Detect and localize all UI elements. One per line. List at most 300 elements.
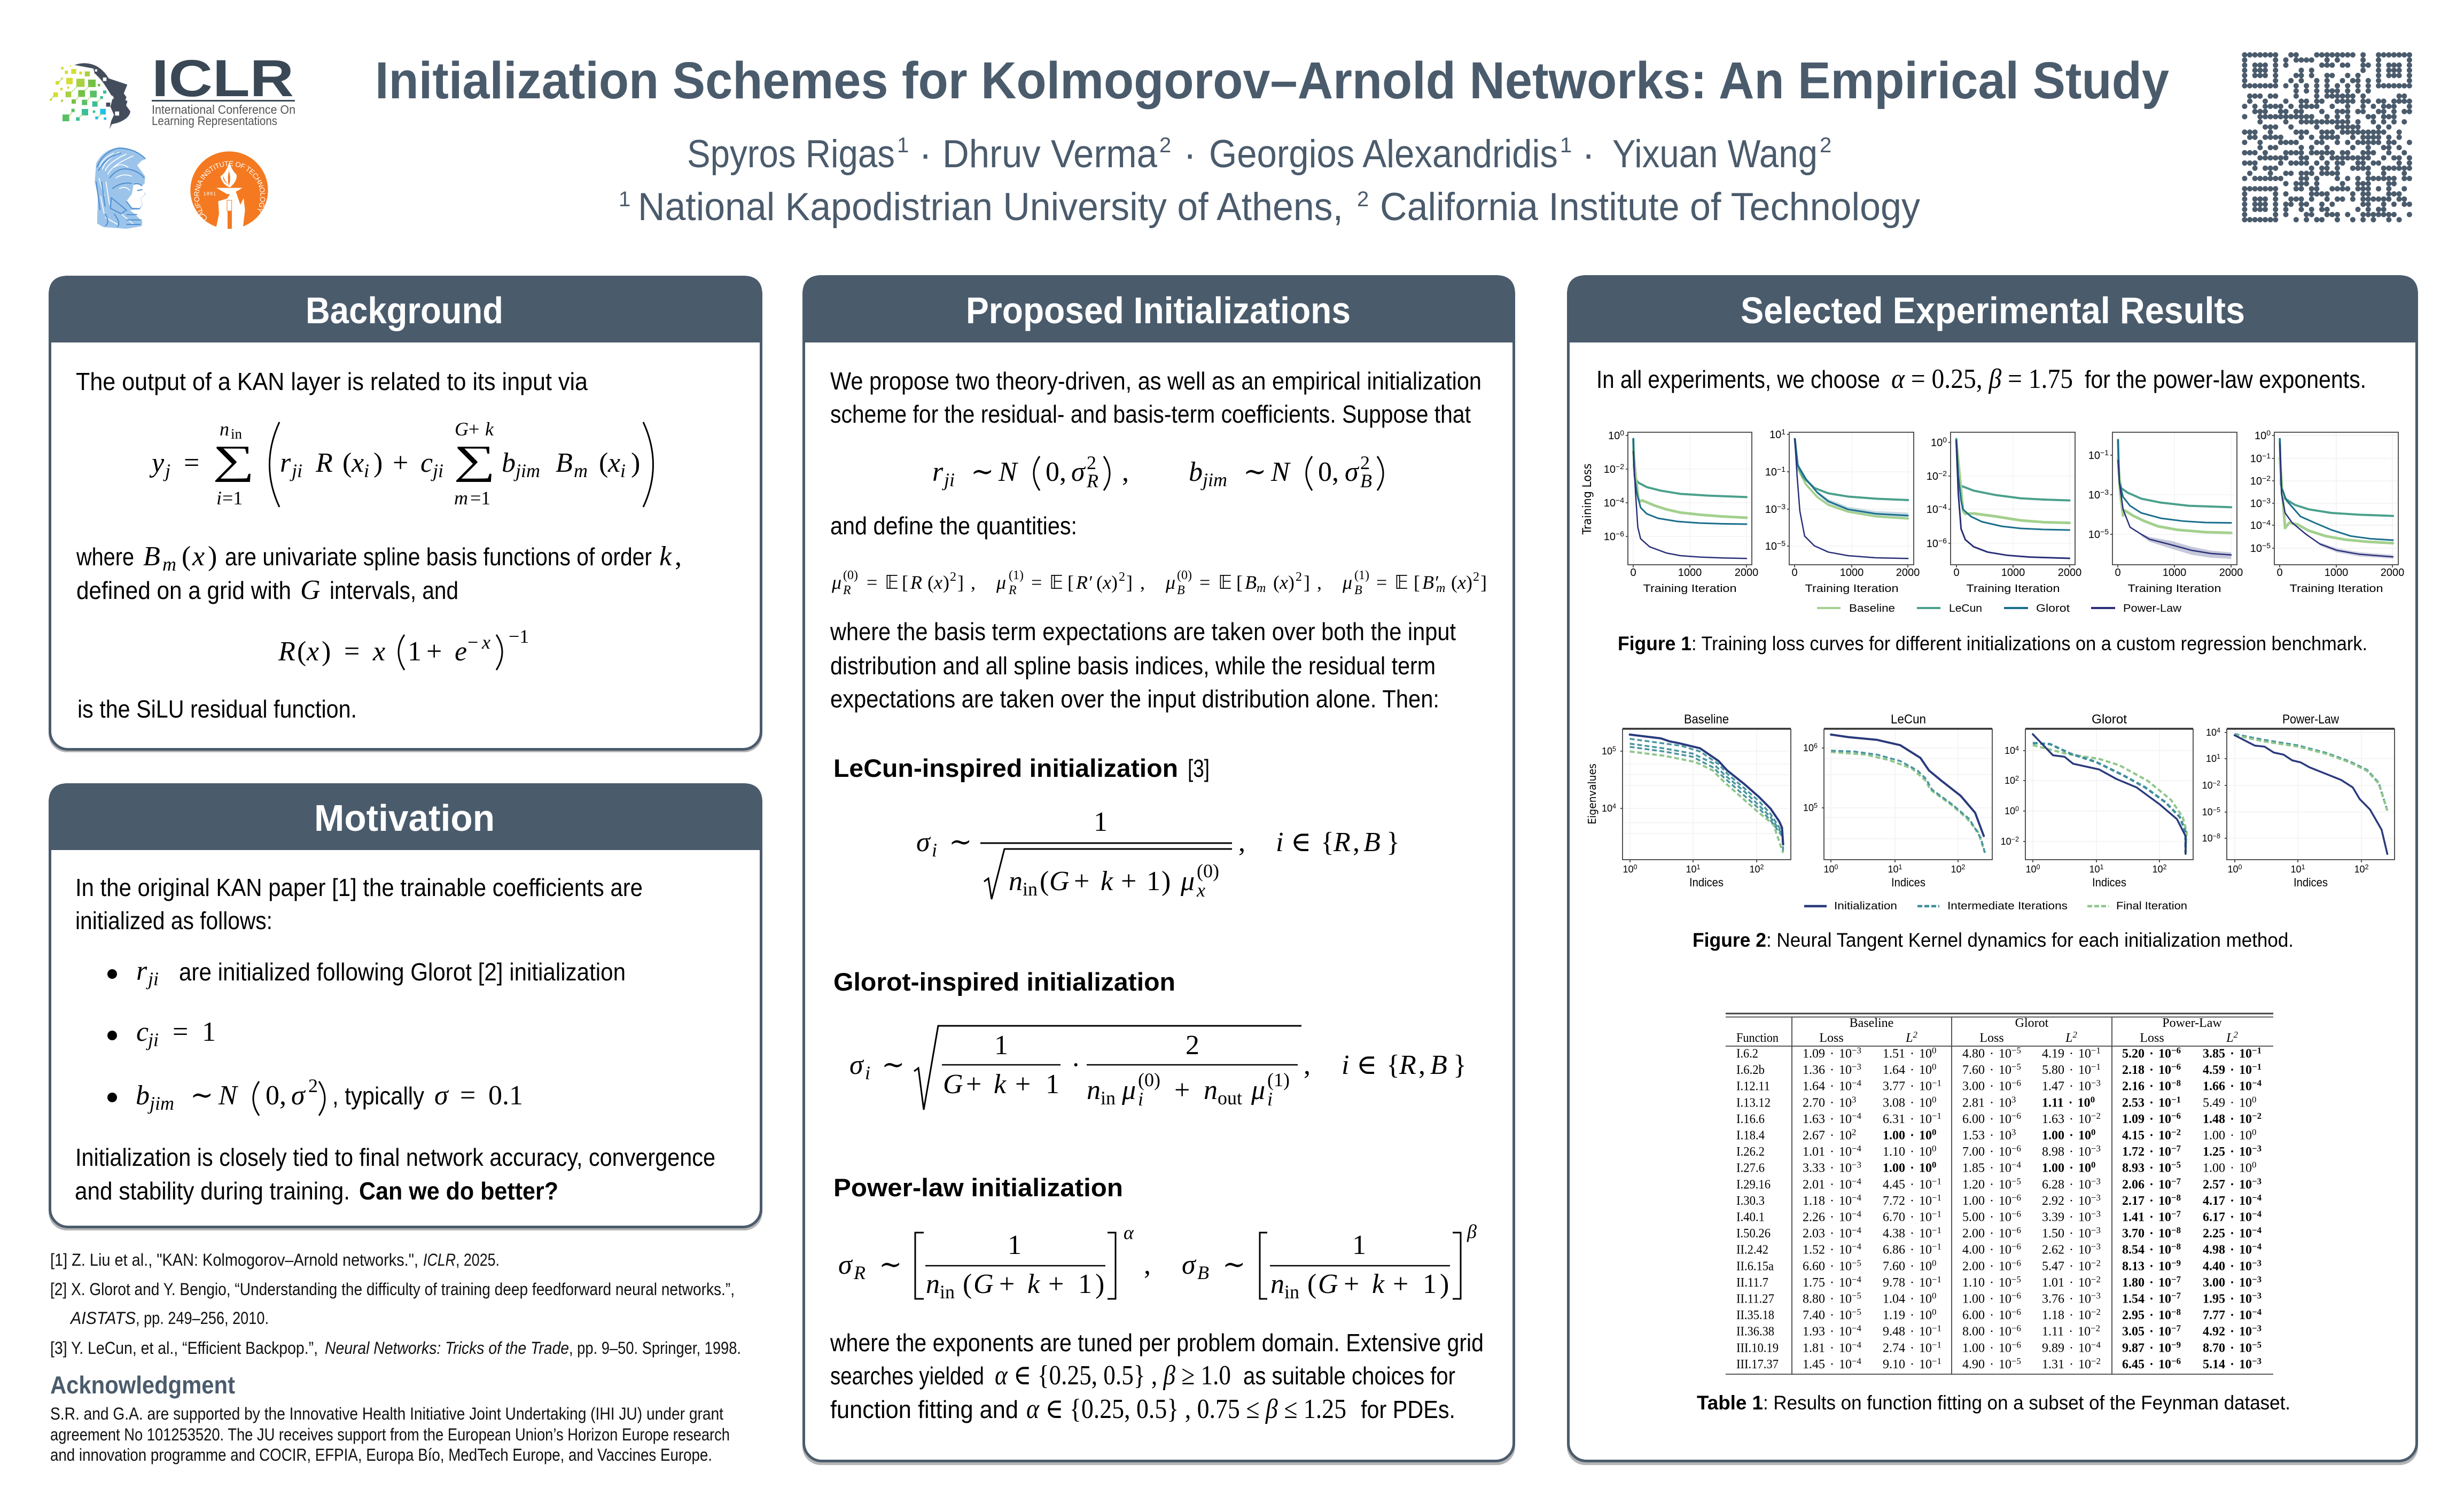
equation: expectations: (0) xyxy=(1177,568,1192,582)
table row: III.10.19: 9.89 · 10−4 xyxy=(2042,1339,2101,1355)
text: grid search results: for PDEs. xyxy=(1361,1396,1455,1423)
equation: coefficient distributions: B xyxy=(1360,470,1372,492)
equation: coefficient distributions: ∼ xyxy=(971,457,994,487)
equation: Power-law: in xyxy=(940,1281,955,1303)
equation: Power-law: + xyxy=(1393,1269,1408,1299)
equation: expectations: B xyxy=(1245,572,1257,593)
text: where B_m: ) xyxy=(208,541,217,572)
equation: Power-law: R xyxy=(853,1262,865,1283)
equation: expectations: μ xyxy=(831,572,841,593)
equation: SiLU: e xyxy=(455,636,467,667)
subplot: LeCun: Indices xyxy=(1891,876,1925,889)
equation: coefficient distributions: ∼ xyxy=(1243,457,1267,487)
equation: expectations: x xyxy=(1457,572,1466,593)
equation: KAN layer: n xyxy=(220,418,229,440)
table row: II.11.27 xyxy=(1736,1290,2262,1306)
equation: coefficient distributions: jim xyxy=(1200,469,1227,490)
table row: I.29.16: 1.20 · 10−5 xyxy=(1962,1176,2021,1191)
table row: II.36.38: 4.92 · 10−3 xyxy=(2203,1323,2262,1339)
table row: I.16.6: 1.48 · 10−2 xyxy=(2203,1111,2262,1126)
table header: L2 xyxy=(2226,1030,2238,1045)
seal year: 1891 xyxy=(204,191,216,196)
table row: I.29.16: 2.01 · 10−4 xyxy=(1803,1176,1861,1191)
equation: coefficient distributions: N xyxy=(1270,457,1291,487)
subplot 3: 2000 xyxy=(2058,567,2081,579)
text: where B_m: defined on a grid with xyxy=(76,576,291,604)
equation: expectations: 2 xyxy=(1119,570,1125,584)
equation: KAN layer: ) xyxy=(373,448,383,478)
equation: expectations: , xyxy=(971,572,976,593)
equation: KAN layer: m xyxy=(454,487,468,509)
caption: Figure 1: : Training loss curves for different initializations on a custom regression benchmark. xyxy=(1691,633,2367,654)
table row: I.18.4: 1.00 · 100 xyxy=(1883,1127,1936,1142)
text: proposal intro: scheme for the residual- and basis-term coefficients. Suppose that xyxy=(830,400,1471,428)
subplot: LeCun: 106 xyxy=(1803,742,1818,753)
equation: expectations: ] xyxy=(1480,572,1487,593)
equation: expectations: μ xyxy=(1165,572,1175,593)
equation: KAN layer: m xyxy=(574,460,588,481)
bullet: b_jim: σ xyxy=(291,1080,306,1111)
table row: I.16.6: 6.31 · 10−1 xyxy=(1883,1111,1941,1126)
equation: coefficient distributions: r xyxy=(932,457,944,487)
subplot: Glorot: 100 xyxy=(2005,805,2019,816)
legend: Figure 2: Final Iteration xyxy=(2116,900,2187,912)
equation: KAN layer: ( xyxy=(599,448,608,478)
equation: expectations: ( xyxy=(1273,572,1280,593)
equation: LeCun: { xyxy=(1321,827,1334,858)
table row: I.27.6: 3.33 · 10−3 xyxy=(1803,1159,1861,1175)
table row: I.27.6: 1.00 · 100 xyxy=(2203,1159,2256,1175)
table row: II.11.7: 9.78 · 10−1 xyxy=(1883,1274,1941,1290)
table row: III.17.37: 9.10 · 10−1 xyxy=(1883,1356,1941,1372)
table row: I.12.11: 3.77 · 10−1 xyxy=(1883,1078,1941,1094)
equation: KAN layer: ∑ xyxy=(454,438,496,482)
table row: III.10.19 xyxy=(1736,1339,2262,1355)
table header: Baseline xyxy=(1850,1016,1893,1030)
table row: I.40.1: 1.41 · 10−7 xyxy=(2122,1209,2181,1225)
subplot title: Glorot: Glorot xyxy=(2092,712,2127,727)
equation: expectations: (1) xyxy=(1354,568,1369,582)
text: where B_m: m xyxy=(162,554,176,575)
bullet: b_jim: ∼ xyxy=(190,1080,214,1111)
table row: I.6.2b: 2.18 · 10−6 xyxy=(2122,1062,2181,1077)
equation: LeCun: , xyxy=(1353,827,1360,858)
equation: Glorot: R xyxy=(1399,1050,1416,1080)
table row: I.6.2 xyxy=(1736,1045,2262,1061)
equation: Power-law: ( xyxy=(1307,1269,1316,1299)
subplot 4: 2000 xyxy=(2219,567,2243,579)
equation: KAN layer: ∑ xyxy=(213,438,255,482)
subplot 2: 10−3 xyxy=(1765,502,1785,516)
text: KAN paper intro xyxy=(75,874,643,934)
table row: II.11.7: 1.80 · 10−7 xyxy=(2122,1274,2181,1290)
logo subtitle: International Conference On xyxy=(152,103,295,116)
equation: KAN layer: y xyxy=(149,448,165,478)
equation: expectations: = xyxy=(1031,572,1042,593)
table row: I.16.6: 1.63 · 10−4 xyxy=(1803,1111,1861,1126)
table row: I.27.6: 1.00 · 100 xyxy=(2042,1159,2095,1175)
subplot 2: 101 xyxy=(1769,427,1785,441)
table row: III.10.19: III.10.19 xyxy=(1736,1341,1779,1355)
seal ring text: CALIFORNIA INSTITUTE OF TECHNOLOGY xyxy=(194,161,265,220)
equation: Glorot: 1 xyxy=(994,1030,1008,1061)
subplot: Glorot: 100 xyxy=(2025,863,2040,875)
table row: I.16.6: 1.63 · 10−2 xyxy=(2042,1111,2101,1126)
bullet: b_jim: jim xyxy=(147,1093,174,1114)
equation: KAN layer xyxy=(149,418,653,511)
table row: II.35.18: 2.95 · 10−8 xyxy=(2122,1307,2181,1322)
caption: Table 1: Table 1 xyxy=(1697,1392,1763,1414)
subplot 2 xyxy=(1765,427,1920,595)
text: acknowledgment xyxy=(50,1404,730,1464)
table row: III.17.37: 1.31 · 10−2 xyxy=(2042,1356,2101,1372)
equation: Power-law: n xyxy=(926,1269,940,1299)
subplot: Power-Law: 102 xyxy=(2354,863,2369,875)
equation: KAN layer: in xyxy=(231,426,243,442)
equation: SiLU: − xyxy=(467,632,478,653)
subplot 5: 1000 xyxy=(2325,567,2348,579)
text: experiments statement xyxy=(1596,364,2366,394)
equation: expectations: B xyxy=(1354,583,1362,597)
equation: Power-law: + xyxy=(1048,1269,1064,1299)
subplot: LeCun xyxy=(1803,712,1992,889)
table row: II.11.27: 3.76 · 10−3 xyxy=(2042,1290,2101,1306)
legend: Figure 2 xyxy=(1804,900,2187,912)
table row: II.11.27: II.11.27 xyxy=(1736,1292,1774,1306)
equation: Glorot: } xyxy=(1453,1050,1467,1080)
equation: expectations: 2 xyxy=(1473,570,1479,584)
equation: expectations: μ xyxy=(996,572,1006,593)
table row: II.35.18: 1.18 · 10−2 xyxy=(2042,1307,2101,1322)
text: SiLU residual: is the SiLU residual function. xyxy=(77,695,357,723)
equation: Glorot: out xyxy=(1218,1087,1242,1109)
equation: Power-law: σ xyxy=(838,1250,853,1280)
table row: III.10.19: 2.74 · 10−1 xyxy=(1883,1339,1941,1355)
equation: Glorot: , xyxy=(1304,1050,1311,1080)
table header: Loss xyxy=(1979,1031,2004,1045)
equation: expectations: ) xyxy=(943,572,949,593)
equation: LeCun: ∈ xyxy=(1291,827,1311,858)
table row: I.40.1: 5.00 · 10−6 xyxy=(1962,1209,2021,1225)
subplot: LeCun: 102 xyxy=(1951,863,1966,875)
subplot: LeCun: 100 xyxy=(1823,863,1838,875)
subplot 3: 10−6 xyxy=(1927,536,1947,550)
equation: Glorot: ∼ xyxy=(882,1050,905,1080)
table row: II.36.38: 1.93 · 10−4 xyxy=(1803,1323,1861,1339)
table row: I.40.1: I.40.1 xyxy=(1736,1211,1765,1225)
equation: KAN layer: + xyxy=(469,418,479,440)
equation: expectations: [ xyxy=(1236,572,1243,593)
equation: coefficient distributions: 0, xyxy=(1046,457,1066,487)
equation: Power-law: α xyxy=(1124,1222,1134,1243)
table row: I.6.2: 4.80 · 10−5 xyxy=(1962,1045,2021,1061)
table row: II.11.27: 1.04 · 100 xyxy=(1883,1290,1936,1306)
caption: Figure 1: Figure 1 xyxy=(1618,633,1691,654)
authors: Dhruv Verma xyxy=(942,133,1157,176)
table row: I.29.16: I.29.16 xyxy=(1736,1178,1771,1191)
icon: ICLR pixel head xyxy=(50,63,130,129)
subplot: Power-Law: 10−2 xyxy=(2202,780,2220,791)
subplot 4: 10−5 xyxy=(2088,527,2109,541)
table row: I.6.2: 4.19 · 10−1 xyxy=(2042,1045,2101,1061)
subplot 5 xyxy=(2250,428,2404,595)
table row: I.13.12: 3.08 · 100 xyxy=(1883,1094,1936,1110)
bullet: b_jim: = xyxy=(460,1080,475,1111)
table row: II.11.7: 3.00 · 10−3 xyxy=(2203,1274,2262,1290)
table row: I.18.4: 1.00 · 100 xyxy=(2203,1127,2256,1142)
equation: Glorot: (0) xyxy=(1138,1069,1160,1090)
legend: Figure 1 xyxy=(1817,603,2182,614)
table row: II.11.27: 8.80 · 10−5 xyxy=(1803,1290,1861,1306)
text: where B_m: intervals, and xyxy=(330,576,458,604)
table row: I.13.12: I.13.12 xyxy=(1736,1096,1771,1110)
table row: I.12.11: 1.47 · 10−3 xyxy=(2042,1078,2101,1094)
table row: II.36.38 xyxy=(1736,1323,2262,1339)
equation: Power-law: ) xyxy=(1440,1269,1449,1299)
table row: II.2.42: 4.00 · 10−6 xyxy=(1962,1241,2021,1257)
equation: expectations: ) xyxy=(1111,572,1118,593)
bullet: r_ji xyxy=(107,956,626,989)
equation: Power-law: G xyxy=(973,1269,994,1299)
table row: I.12.11: 1.64 · 10−4 xyxy=(1803,1078,1861,1094)
table row: I.13.12: 1.11 · 100 xyxy=(2042,1094,2095,1110)
affiliations: National Kapodistrian University of Athens, xyxy=(638,185,1343,229)
legend: Figure 1: LeCun xyxy=(1949,603,1982,614)
table row: I.16.6: 6.00 · 10−6 xyxy=(1962,1111,2021,1126)
equation: expectations: [ xyxy=(1067,572,1074,593)
equation: LeCun: G xyxy=(1049,866,1070,897)
authors: 1 xyxy=(1560,134,1572,157)
equation: KAN layer: = xyxy=(184,448,199,478)
equation: coefficient distributions xyxy=(932,452,1383,492)
affiliations xyxy=(619,185,1920,229)
panel: Selected Experimental Results xyxy=(1567,275,2418,1465)
table row: I.27.6: 8.93 · 10−5 xyxy=(2122,1159,2181,1175)
table row: I.12.11 xyxy=(1736,1078,2262,1094)
equation: LeCun: R xyxy=(1333,827,1351,858)
equation: coefficient distributions: ji xyxy=(942,469,955,490)
legend: Figure 1: Power-Law xyxy=(2123,603,2182,614)
table row: I.29.16: 6.28 · 10−3 xyxy=(2042,1176,2101,1191)
subplot 2: 2000 xyxy=(1896,567,1920,579)
equation: expectations: , xyxy=(1317,572,1322,593)
equation: KAN layer: r xyxy=(280,448,291,478)
equation: KAN layer: B xyxy=(556,448,573,478)
table row: I.30.3: 1.00 · 10−6 xyxy=(1962,1193,2021,1208)
table row: II.2.42: 2.62 · 10−3 xyxy=(2042,1241,2101,1257)
equation: Power-law: k xyxy=(1372,1269,1385,1299)
table row: I.18.4: 1.53 · 103 xyxy=(1962,1127,2016,1142)
subplot: Glorot: 101 xyxy=(2089,863,2104,875)
authors: · xyxy=(1582,133,1595,176)
equation: Power-law: 1 xyxy=(1423,1269,1437,1299)
equation: Glorot: μ xyxy=(1121,1075,1136,1105)
text: define quantities: and define the quantities: xyxy=(830,512,1077,540)
table row: I.6.2b xyxy=(1736,1062,2262,1077)
table row: III.17.37: 1.45 · 10−4 xyxy=(1803,1356,1861,1372)
equation: expectations: 𝔼 xyxy=(1049,572,1063,594)
table row: II.35.18 xyxy=(1736,1307,2262,1322)
subplot title: Baseline: Baseline xyxy=(1684,712,1729,727)
equation: coefficient distributions: 0, xyxy=(1318,457,1339,487)
equation: expectations: ( xyxy=(1451,572,1457,593)
table row: I.30.3: 2.92 · 10−3 xyxy=(2042,1193,2101,1208)
equation: LeCun: + xyxy=(1074,866,1089,897)
authors: · xyxy=(1183,133,1196,176)
subplot title: LeCun: LeCun xyxy=(1891,712,1926,727)
subplot title: Power-Law: Power-Law xyxy=(2282,712,2340,727)
heading: Glorot-inspired: Glorot-inspired initialization xyxy=(833,968,1175,996)
equation: KAN layer: R xyxy=(315,448,333,478)
text: grid search results xyxy=(830,1329,1484,1424)
equation: Power-law: n xyxy=(1270,1269,1284,1299)
authors: Georgios Alexandridis xyxy=(1209,133,1558,176)
equation: Glorot: μ xyxy=(1251,1075,1265,1105)
table row: II.11.7: 1.75 · 10−4 xyxy=(1803,1274,1861,1290)
subplot 4: 10−1 xyxy=(2088,448,2109,462)
table row: I.12.11: I.12.11 xyxy=(1736,1080,1770,1094)
equation: expectations: m xyxy=(1257,581,1266,595)
logo subtitle xyxy=(152,103,295,128)
table row: I.50.26: 2.03 · 10−4 xyxy=(1803,1225,1861,1241)
references: [2] X. Glorot and Y. Bengio, “Understanding the difficulty of training deep feedforward neural networks.”, xyxy=(50,1280,735,1299)
subplot 3: 0 xyxy=(1953,567,1960,579)
subplot 3 xyxy=(1927,432,2081,595)
table row: I.26.2: 1.01 · 10−4 xyxy=(1803,1143,1861,1159)
subplot: Baseline xyxy=(1602,712,1791,889)
text: grid search results: α ∈ {0.25, 0.5} , β ≥ 1.0 xyxy=(995,1360,1231,1391)
equation: SiLU: 1 xyxy=(408,636,422,667)
table row: I.30.3: 4.17 · 10−4 xyxy=(2203,1193,2262,1208)
table row: II.11.27: 1.00 · 10−6 xyxy=(1962,1290,2021,1306)
equation: LeCun: σ xyxy=(916,827,931,858)
icon: QR code xyxy=(2244,55,2410,220)
caption: Figure 2: : Neural Tangent Kernel dynamics for each initialization method. xyxy=(1766,929,2294,951)
subplot 5: 10−1 xyxy=(2250,451,2271,465)
subplot: Baseline: 100 xyxy=(1623,863,1638,875)
subplot: Glorot: 102 xyxy=(2152,863,2167,875)
equation: Glorot: i xyxy=(1267,1088,1273,1110)
table row: I.50.26: 1.50 · 10−3 xyxy=(2042,1225,2101,1241)
bullet: b_jim: 2 xyxy=(308,1075,318,1096)
table row: II.6.15a: 7.60 · 100 xyxy=(1883,1258,1936,1273)
equation: Glorot: , xyxy=(1418,1050,1425,1080)
references: , 2025. xyxy=(456,1250,500,1269)
text: where B_m: B xyxy=(143,541,160,572)
bullet: b_jim: σ xyxy=(434,1080,449,1111)
equation: expectations: R xyxy=(843,583,851,597)
subplot: Power-Law: 104 xyxy=(2206,727,2220,738)
table header: Power-Law xyxy=(2162,1016,2222,1030)
text: grid search results: α ∈ {0.25, 0.5} , 0.75 ≤ β ≤ 1.25 xyxy=(1026,1394,1346,1424)
subplot: Power-Law: 101 xyxy=(2290,863,2305,875)
table row: III.10.19: 1.00 · 10−6 xyxy=(1962,1339,2021,1355)
text: where B_m: ( xyxy=(182,541,191,572)
table row: I.50.26: 4.38 · 10−1 xyxy=(1883,1225,1941,1241)
equation: SiLU: = xyxy=(344,636,360,667)
equation: Glorot: G xyxy=(943,1069,963,1100)
table row: II.36.38: 3.05 · 10−7 xyxy=(2122,1323,2181,1339)
subplot 5: 10−4 xyxy=(2250,518,2271,532)
equation: KAN layer: k xyxy=(485,418,494,440)
table row: III.17.37: 5.14 · 10−3 xyxy=(2203,1356,2262,1372)
equation: expectations: B′ xyxy=(1422,572,1439,593)
table row: II.6.15a: 6.60 · 10−5 xyxy=(1803,1258,1861,1273)
equation: Glorot xyxy=(849,1026,1467,1110)
table header: Glorot xyxy=(2015,1016,2049,1030)
legend: Figure 1: Glorot xyxy=(2036,603,2070,614)
table row: II.11.7: 1.10 · 10−5 xyxy=(1962,1274,2021,1290)
equation: expectations: = xyxy=(1199,572,1210,593)
subplot: Glorot: Indices xyxy=(2092,876,2126,889)
equation: expectations: 𝔼 xyxy=(1218,572,1232,594)
table row: I.50.26: I.50.26 xyxy=(1736,1227,1771,1241)
subplot 4: 0 xyxy=(2115,567,2121,579)
equation: KAN layer: c xyxy=(420,448,433,478)
equation: Glorot: n xyxy=(1204,1075,1218,1105)
subplot: Baseline: 102 xyxy=(1749,863,1764,875)
table row: I.6.2b: 5.80 · 10−1 xyxy=(2042,1062,2101,1077)
text: expectations explanation xyxy=(830,618,1456,713)
heading: Power-law: Power-law initialization xyxy=(833,1173,1123,1202)
equation: Power-law: σ xyxy=(1182,1250,1197,1280)
authors: Spyros Rigas xyxy=(687,133,895,176)
equation: coefficient distributions: R xyxy=(1086,470,1098,492)
equation: LeCun: x xyxy=(1196,879,1205,901)
table row: I.30.3: 2.17 · 10−8 xyxy=(2122,1193,2181,1208)
equation: KAN layer: i xyxy=(620,460,626,481)
equation: expectations: [ xyxy=(902,572,908,593)
subplot 3: Training Iteration xyxy=(1966,583,2060,595)
subplot 4: Training Iteration xyxy=(2127,583,2221,595)
panel: Background xyxy=(49,276,762,752)
equation: SiLU: x xyxy=(372,636,385,667)
table row: I.6.2b: 1.36 · 10−3 xyxy=(1803,1062,1861,1077)
subplot 5: 10−5 xyxy=(2250,541,2271,555)
table row: I.18.4: I.18.4 xyxy=(1736,1128,1765,1142)
table row: I.27.6: I.27.6 xyxy=(1736,1162,1765,1175)
heading: Proposed Initializations: Proposed Initializations xyxy=(966,290,1351,331)
equation: SiLU: ( xyxy=(297,636,306,667)
table row: II.11.7: 1.01 · 10−2 xyxy=(2042,1274,2101,1290)
equation: expectations: [ xyxy=(1414,572,1420,593)
equation: LeCun: 1 xyxy=(1094,807,1108,837)
equation: expectations: ( xyxy=(1096,572,1103,593)
subplot 1: 10−6 xyxy=(1604,529,1624,543)
equation: Glorot: σ xyxy=(849,1050,864,1080)
equation: SiLU: −1 xyxy=(509,626,529,647)
equation: Glorot: + xyxy=(1015,1069,1031,1100)
equation: expectations: ] xyxy=(1126,572,1133,593)
table row: I.26.2: 7.00 · 10−6 xyxy=(1962,1143,2021,1159)
table header xyxy=(1736,1016,2238,1045)
subplot: Glorot: 10−2 xyxy=(2001,836,2019,847)
table row: II.2.42: 8.54 · 10−8 xyxy=(2122,1241,2181,1257)
table row: II.6.15a: 8.13 · 10−9 xyxy=(2122,1258,2181,1273)
table row: I.27.6: 1.85 · 10−4 xyxy=(1962,1159,2021,1175)
bullet: r_ji: ji xyxy=(146,968,159,989)
text: expectations explanation: distribution and all spline basis indices, while the residual term xyxy=(830,652,1436,680)
table row: I.29.16: 4.45 · 10−1 xyxy=(1883,1176,1941,1191)
equation: LeCun: i xyxy=(1276,827,1283,858)
bullet: b_jim xyxy=(107,1075,523,1116)
subplot 3: 10−2 xyxy=(1927,469,1947,482)
equation: Glorot: i xyxy=(1138,1088,1143,1110)
subplot 2: 0 xyxy=(1791,567,1798,579)
heading: Background: Background xyxy=(306,290,503,331)
equation: Glorot: k xyxy=(994,1069,1007,1100)
subplot 1 xyxy=(1604,428,1758,595)
